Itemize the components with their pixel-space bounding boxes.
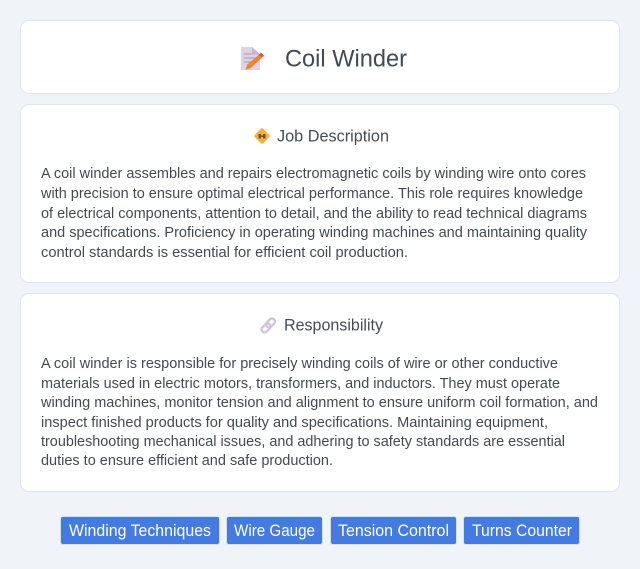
title: Coil Winder	[285, 46, 407, 72]
text block: job description	[40, 166, 588, 261]
text block: job description: and specifications. Proficiency in operating winding machines and maintaining quality	[41, 225, 588, 241]
heading: responsibility: Responsibility	[284, 316, 384, 334]
tag: Winding Techniques	[60, 516, 220, 545]
tag labels: Tension Control	[338, 522, 449, 540]
panel: title card	[20, 20, 620, 94]
text block: responsibility	[40, 356, 598, 469]
tag: Tension Control	[330, 516, 457, 545]
text block: responsibility: inspect finished products for quality and specifications. Maintaining equipment,	[41, 415, 548, 431]
text block: job description: A coil winder assembles and repairs electromagnetic coils by winding wire onto cores	[41, 166, 586, 182]
text block: job description: control standards is essential for efficient coil production.	[41, 245, 408, 261]
tag labels: Wire Gauge	[234, 522, 315, 540]
icon: job description diamond sign	[254, 128, 270, 144]
panel: responsibility card	[20, 293, 620, 492]
icon: link	[260, 317, 276, 334]
text block: responsibility: troubleshooting mechanical issues, and adhering to safety standards are essential	[41, 434, 565, 450]
text block: responsibility: winding machines, monitor tension and alignment to ensure uniform coil formation, and	[40, 395, 598, 411]
tag labels	[69, 522, 572, 540]
tag: Wire Gauge	[226, 516, 323, 545]
heading: job description: Job Description	[277, 128, 389, 146]
text block: responsibility: duties to ensure efficient and safe production.	[41, 453, 333, 469]
tag labels: Turns Counter	[472, 522, 572, 540]
tag labels: Winding Techniques	[69, 522, 211, 540]
tag: Turns Counter	[463, 516, 580, 545]
text block: job description: with precision to ensure optimal electrical performance. This role requires knowledge	[40, 186, 583, 202]
text block: responsibility: materials used in electric motors, transformers, and inductors. They must operate	[41, 376, 560, 392]
text block: responsibility: A coil winder is responsible for precisely winding coils of wire or other conductive	[41, 356, 558, 372]
text block: job description: of electrical components, attention to detail, and the ability to read technical diagrams	[41, 206, 587, 222]
icon: memo with pencil	[241, 47, 264, 70]
panel: job description card	[20, 104, 620, 283]
